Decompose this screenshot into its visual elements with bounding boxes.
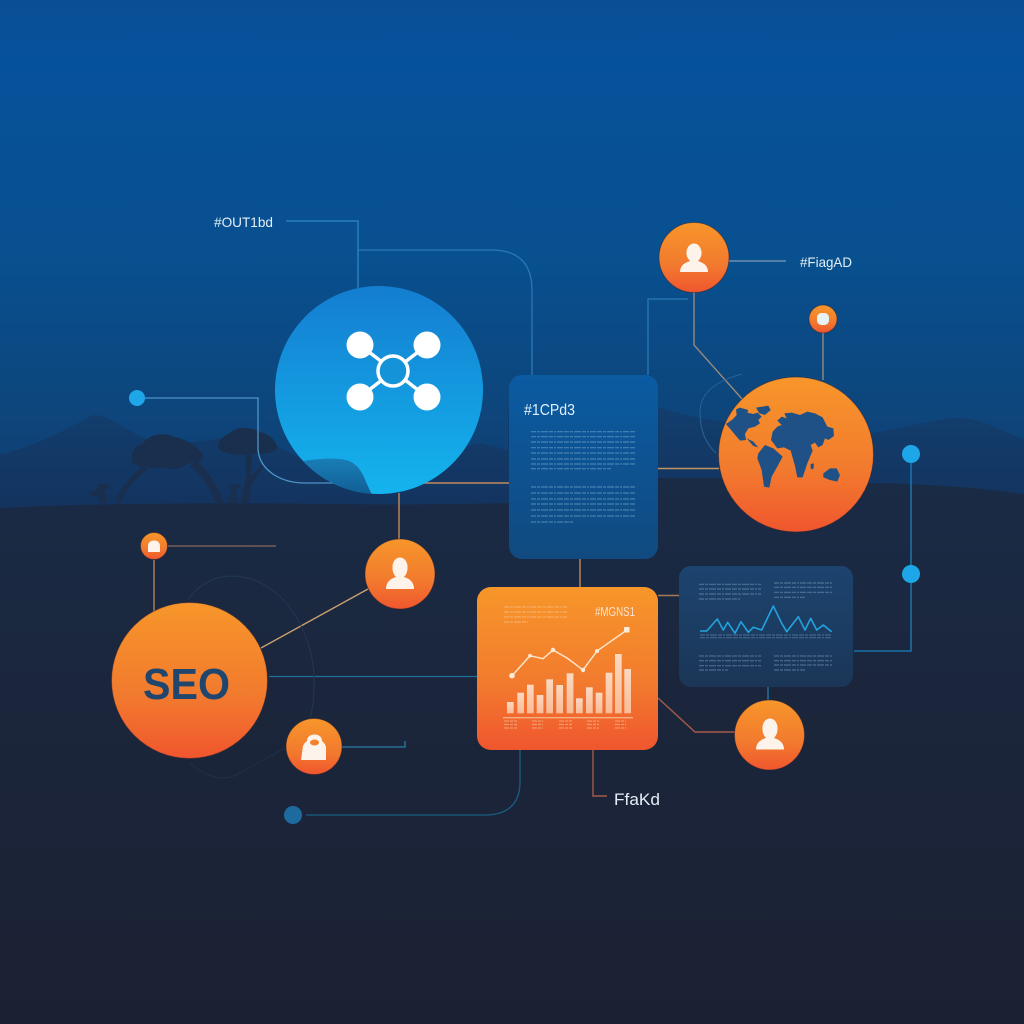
- line chart: [700, 606, 832, 633]
- trend line: [509, 627, 630, 678]
- continents: [726, 406, 840, 488]
- label: top left: #OUT1bd: [214, 214, 273, 230]
- icon: lock: [301, 734, 326, 760]
- panel: orange bar chart: [477, 587, 658, 750]
- axis and tick labels: [503, 718, 633, 728]
- icon: person: [680, 244, 708, 272]
- document heading: #1CPd3: [524, 402, 575, 419]
- icon: network nodes: [346, 332, 440, 410]
- blue dot: right lower: [902, 565, 920, 583]
- orange user circle: middle left: [365, 539, 435, 609]
- bars: [507, 654, 631, 713]
- SEO circle: [112, 602, 268, 758]
- landscape: ground: [0, 478, 1024, 1024]
- panel: dark line chart: [679, 566, 853, 687]
- page curl: [303, 458, 372, 494]
- panel: text document: [509, 375, 658, 559]
- small orange ring: top right: [809, 305, 837, 333]
- icon: person: [756, 718, 784, 750]
- connector lines: blue: [145, 221, 911, 815]
- document text lines: [531, 432, 636, 522]
- blue dot: left: [129, 390, 145, 406]
- label: bottom: FfaKd: [614, 791, 660, 809]
- chart axis labels: [700, 635, 831, 638]
- orange user circle: bottom right: [734, 700, 804, 770]
- blue dot: right upper: [902, 445, 920, 463]
- blue network circle: [275, 286, 483, 497]
- icon: person: [386, 558, 414, 589]
- chart text lines: [504, 607, 567, 622]
- label: top right: #FiagAD: [800, 254, 852, 270]
- landscape: tree silhouettes: [88, 428, 277, 503]
- chart heading: #MGNS1: [595, 605, 635, 619]
- orange lock circle: [286, 718, 342, 774]
- panel text lines: [699, 583, 833, 670]
- orange globe: [718, 377, 874, 532]
- SEO text: SEO: [143, 660, 230, 709]
- faint orbit arcs: [188, 374, 742, 778]
- blue dot: bottom: [284, 806, 302, 824]
- icon: small square: [817, 313, 829, 325]
- landscape: distant mountains: [0, 404, 1024, 540]
- orange user circle: top: [659, 222, 729, 292]
- small orange ring: left: [140, 532, 168, 560]
- icon: dome: [148, 540, 160, 552]
- connector lines: orange and grey: [154, 261, 823, 796]
